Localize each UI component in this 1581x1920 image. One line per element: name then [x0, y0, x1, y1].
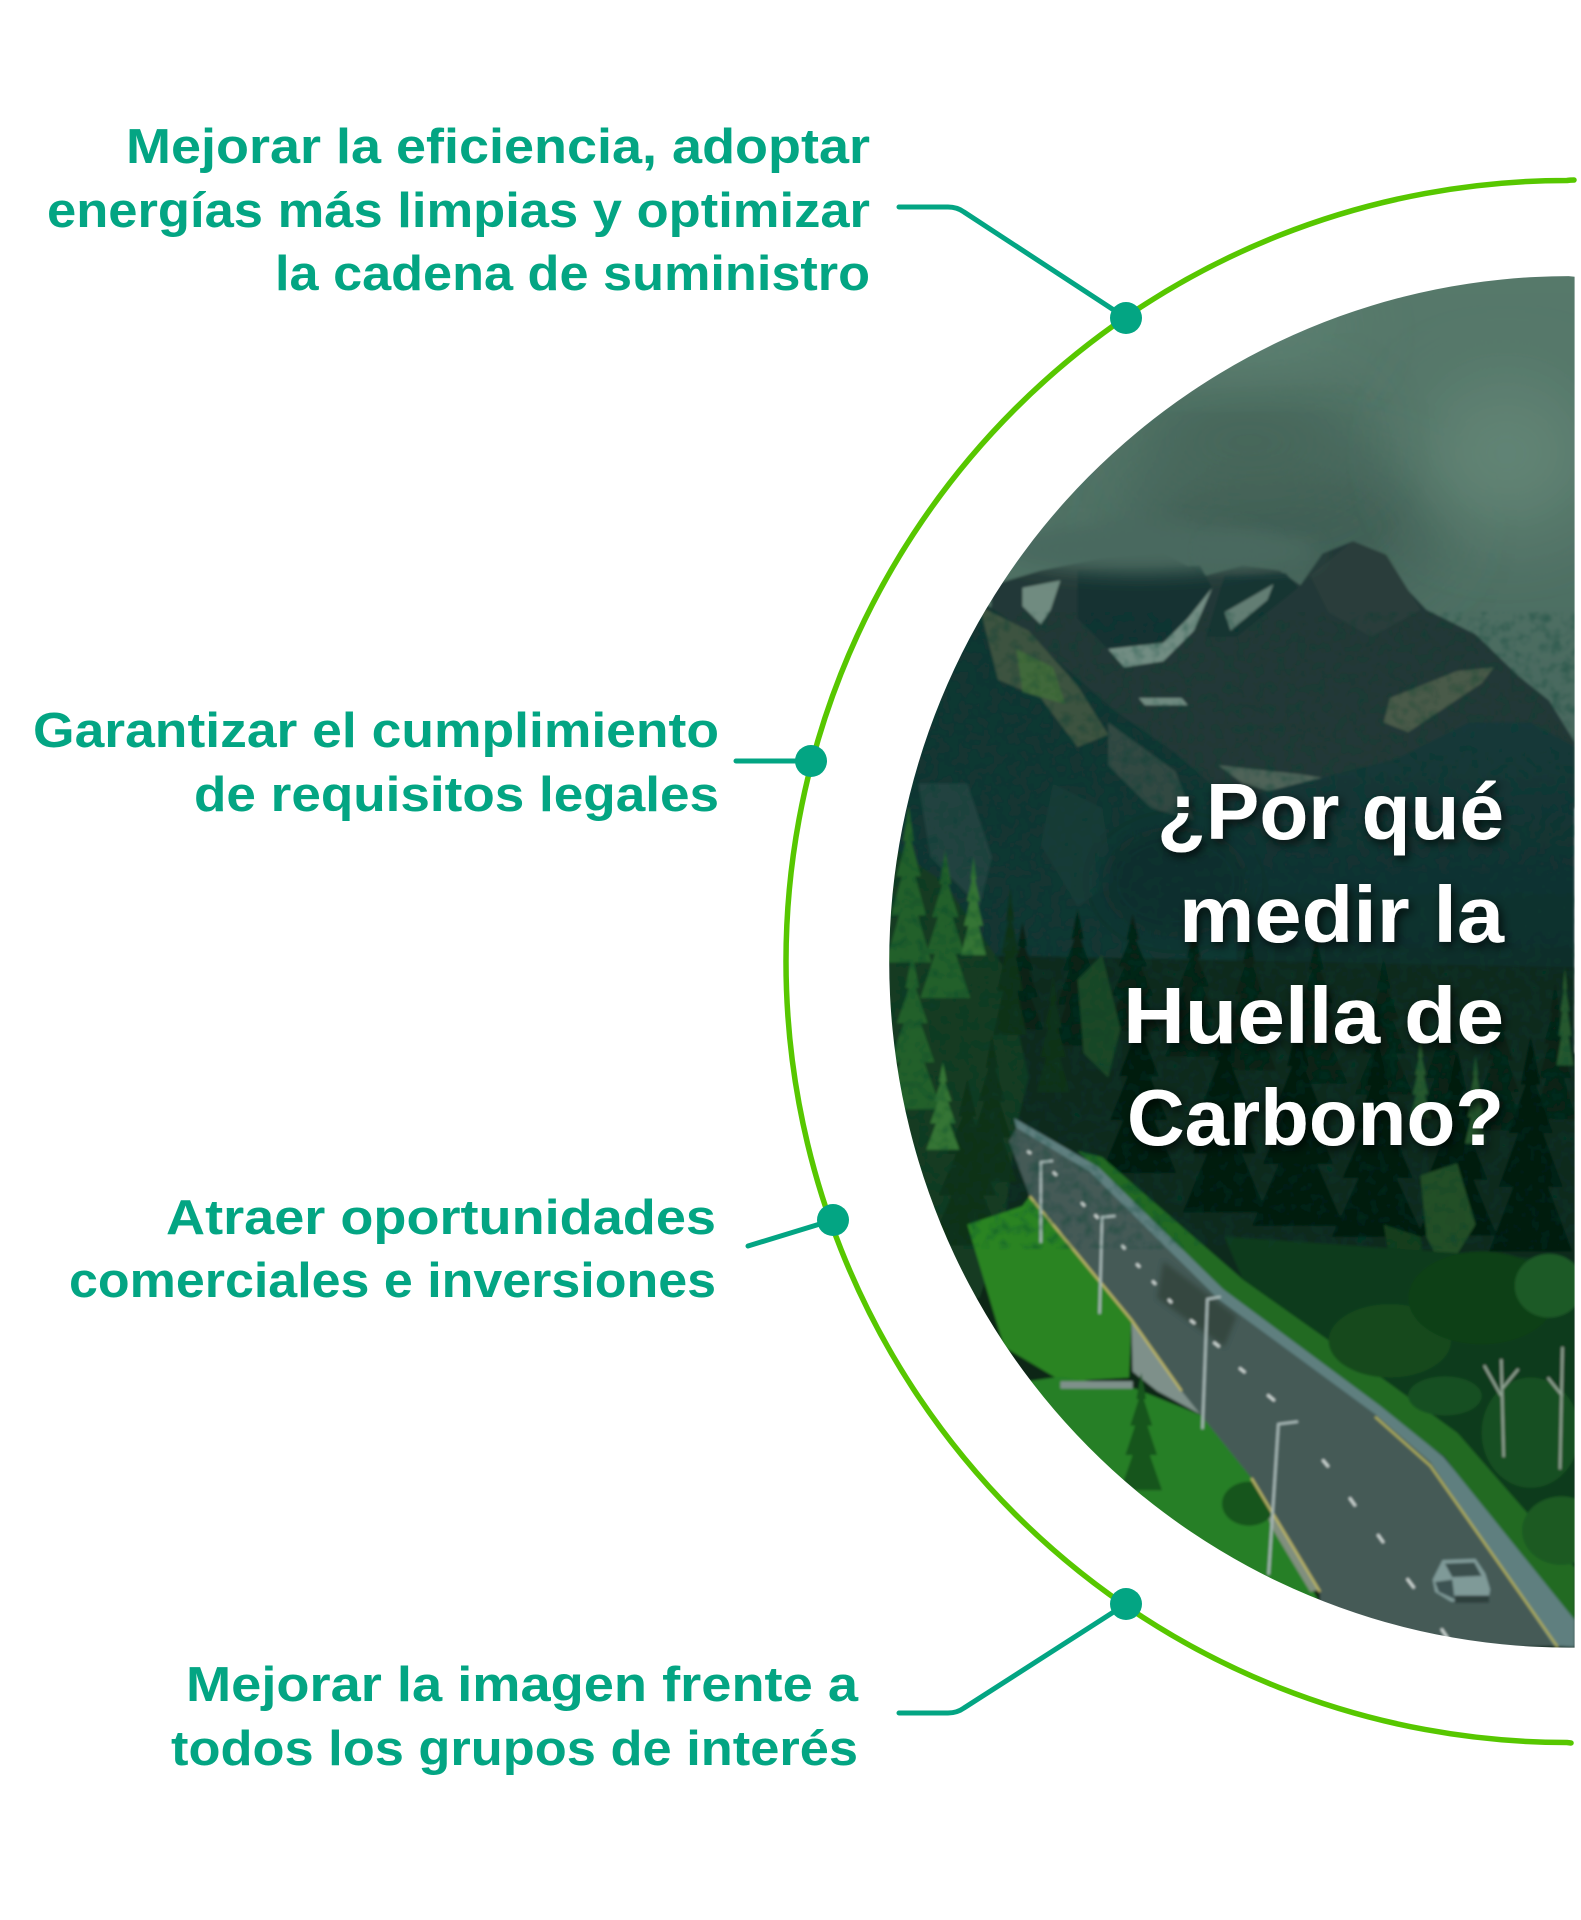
text block: imagen — [171, 1658, 859, 1776]
text block: oportunidades: comerciales e inversiones — [69, 1254, 716, 1308]
text block: oportunidades: Atraer oportunidades — [166, 1191, 716, 1245]
text block: eficiencia: Mejorar la eficiencia, adoptar — [126, 120, 870, 174]
heading: medir la — [1179, 870, 1505, 959]
text block: imagen: Mejorar la imagen frente a — [186, 1658, 859, 1712]
connector and dot: oportunidades — [748, 1204, 849, 1246]
connector and dot: requisitos legales — [736, 745, 827, 777]
circular photo: mountain road — [857, 245, 1581, 1653]
text block: requisitos legales: Garantizar el cumplimiento — [33, 704, 719, 758]
text block: eficiencia — [47, 120, 870, 301]
sky — [988, 276, 1575, 810]
connector and dot: imagen — [899, 1588, 1142, 1713]
grass left of road — [966, 1196, 1320, 1600]
bright trees at left — [883, 806, 1120, 1298]
heading — [1123, 767, 1505, 1162]
text block: imagen: todos los grupos de interés — [171, 1722, 858, 1776]
slope right of road: bushes and grass — [1078, 1151, 1581, 1641]
text block: eficiencia: la cadena de suministro — [275, 247, 870, 301]
heading: Carbono? — [1127, 1073, 1504, 1162]
dark lower mountain — [1228, 722, 1574, 1050]
text block: oportunidades — [69, 1191, 716, 1308]
text block: requisitos legales: de requisitos legales — [194, 768, 719, 822]
left wooded slope — [889, 605, 1264, 1008]
road with guardrail, dashes and lamps — [1009, 1118, 1575, 1653]
text block: eficiencia: energías más limpias y optimizar — [47, 184, 870, 238]
photo texture — [857, 612, 1581, 1249]
connector and dot: eficiencia — [899, 207, 1142, 334]
far mountain — [990, 534, 1574, 966]
car — [1433, 1559, 1490, 1603]
snow patches — [1022, 580, 1060, 624]
heading: ¿Por qué — [1157, 767, 1504, 856]
heading: Huella de — [1123, 971, 1504, 1060]
text block: requisitos legales — [33, 704, 719, 822]
outer green arc — [786, 180, 1574, 1743]
dark forest — [976, 912, 1575, 1648]
